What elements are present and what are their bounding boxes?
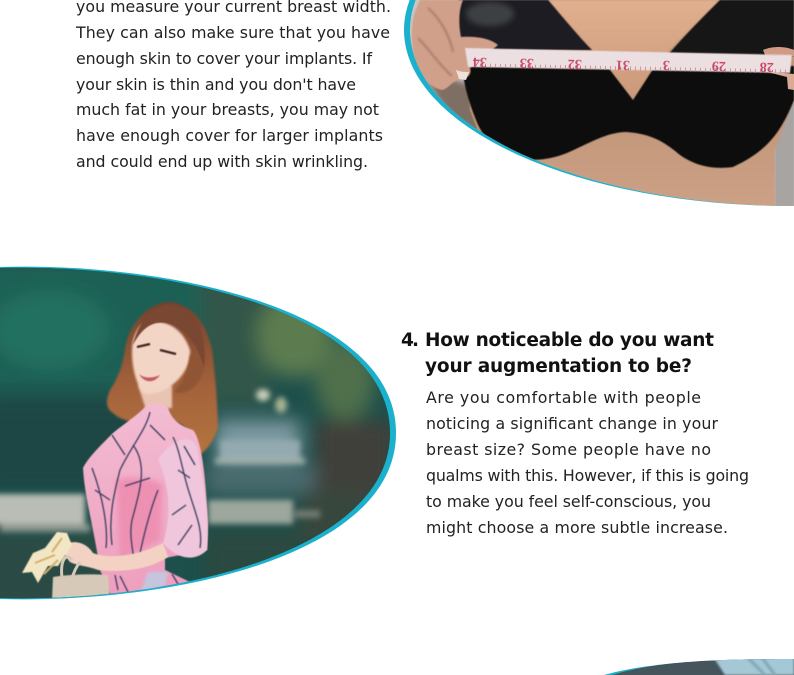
sleeve [158,439,208,558]
tape measure: 34 [473,54,487,69]
hair [107,302,218,455]
bra upper left cup [457,0,592,50]
forearm and hand [63,542,168,571]
tape measure: 32 [568,56,582,71]
dress torso [83,403,208,594]
heading: question 4: How noticeable do you want [425,330,714,351]
text block: question 4 answer: might choose a more subtle increase. [426,518,728,537]
neck [138,385,172,410]
text block: question 4 answer: noticing a significant change in your [426,414,718,433]
woven basket [52,574,110,600]
tape measure [465,48,792,74]
photo: tape measure around black bra [400,0,794,215]
text block: measuring width paragraph: your skin is thin and you don't have [76,75,356,94]
blurred lake background [0,265,400,600]
bra upper right cup [667,0,794,56]
heading: question 4 [401,330,714,377]
text block: measuring width paragraph: have enough cover for larger implants [76,126,383,145]
photo: woman in pink dress by a lake [0,260,400,610]
tape measure: 33 [520,55,534,70]
text block: measuring width paragraph: They can also make sure that you have [75,23,390,42]
text block: question 4 answer: to make you feel self-conscious, you [426,492,711,511]
photo frame: teal crescent [404,0,794,206]
tape measure: 29 [712,58,726,73]
torso skin [462,0,794,215]
left hand [412,0,498,90]
blossom branch pattern [92,412,201,592]
text block: question 4 answer: qualms with this. However, if this is going [426,466,749,485]
heading: question 4: 4. [401,330,419,351]
backdrop [400,0,794,215]
text block: measuring width paragraph: enough skin to cover your implants. If [76,49,372,68]
tape measure: 3 [663,57,670,72]
text block: measuring width paragraph: much fat in your breasts, you may not [76,100,379,119]
tape measure: 28 [760,59,774,74]
heading: question 4: your augmentation to be? [425,356,692,377]
woman [22,302,218,600]
right hand [763,47,794,56]
fringe [132,320,205,367]
waist accent [116,478,163,560]
eyes and lips [137,344,176,354]
photo: top of next section image [604,659,794,675]
text block: measuring width paragraph: and could end up with skin wrinkling. [76,152,368,171]
skirt underlayer [140,572,168,593]
text block: measuring width paragraph [75,0,391,171]
flowers [22,532,72,583]
tape measure: 31 [616,57,630,72]
face [132,322,190,394]
text block: question 4 answer: Are you comfortable with people [426,388,701,407]
text block: question 4 answer [426,388,749,537]
photo frame: teal crescent [0,267,396,599]
text block: question 4 answer: breast size? Some people have no [426,440,711,459]
bra lower cups [462,66,794,168]
